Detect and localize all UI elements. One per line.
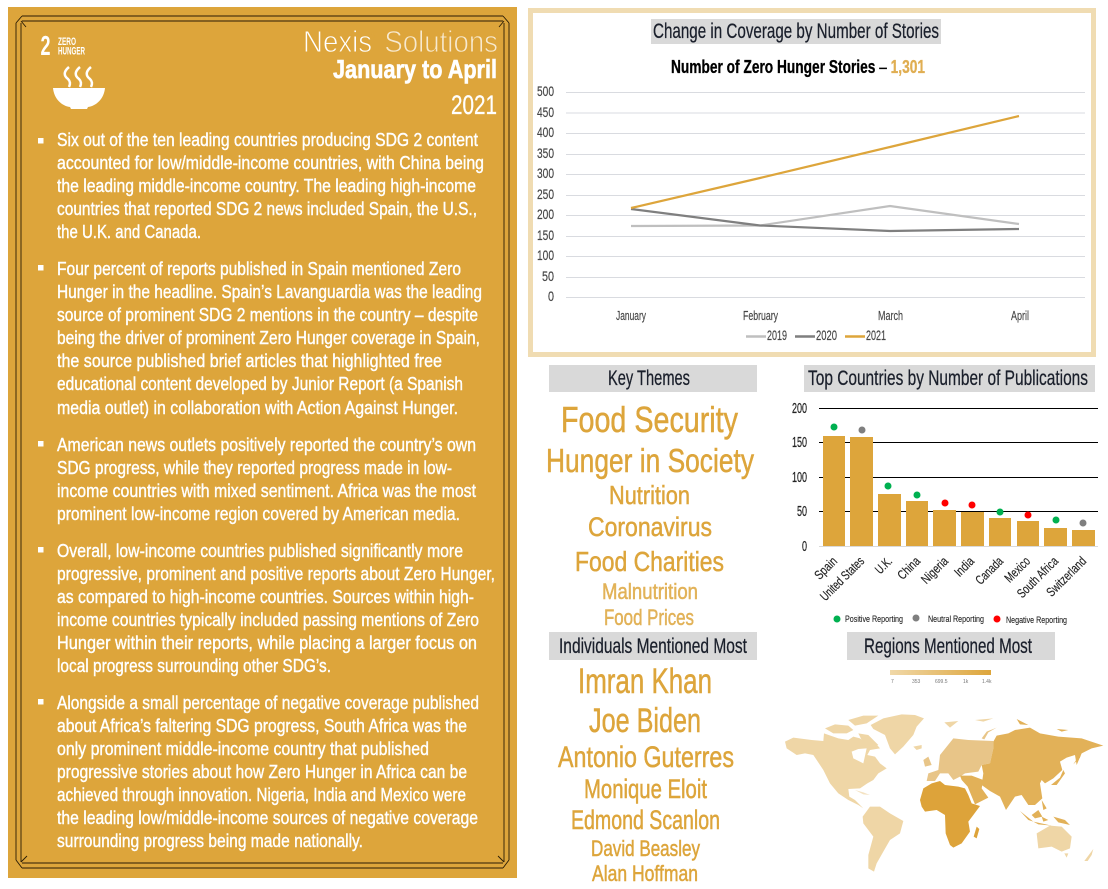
map legend: 699.5 (935, 679, 948, 685)
heading: regions: Regions Mentioned Most (864, 635, 1032, 658)
finding 4: Overall, low-income countries published significantly more (57, 540, 463, 561)
heading: key themes: Key Themes (608, 367, 690, 390)
finding 5: only prominent middle-income country that published (57, 738, 429, 759)
finding 2: educational content developed by Junior Report (a Spanish (57, 373, 463, 394)
heading: date range: January to April (333, 54, 497, 84)
map legend: 1.4k (982, 679, 992, 685)
word cloud: key themes: Food Security (561, 399, 738, 440)
word cloud: individuals (558, 662, 734, 886)
chart legend (746, 328, 886, 343)
heading: individuals (549, 632, 757, 660)
finding 3: prominent low-income region covered by American media. (57, 503, 460, 524)
word cloud: individuals: Imran Khan (578, 662, 712, 701)
finding 3: income countries with mixed sentiment. Africa was the most (57, 480, 476, 501)
word cloud: key themes: Food Charities (575, 546, 724, 577)
finding 3: American news outlets positively reported the country’s own (57, 434, 476, 455)
bar chart legend: Neutral Reporting (928, 614, 984, 625)
finding 4: local progress surrounding other SDG’s. (57, 655, 331, 676)
bar chart: top countries (792, 400, 1098, 626)
finding 2: Four percent of reports published in Spain mentioned Zero (57, 258, 461, 279)
finding 5: the leading low/middle-income sources of negative coverage (57, 807, 478, 828)
map legend: 7 (891, 679, 894, 685)
line chart: 0 (548, 289, 554, 304)
bar chart: top countries: China (894, 553, 924, 583)
word cloud: individuals: Edmond Scanlon (571, 805, 720, 835)
word cloud: individuals: Monique Eloit (584, 774, 707, 804)
finding 5: about Africa’s faltering SDG progress, South Africa was the (57, 715, 467, 736)
finding 4: Hunger within their reports, while placing a larger focus on (57, 632, 477, 653)
finding 5: achieved through innovation. Nigeria, India and Mexico were (57, 784, 466, 805)
map: Eurasia, Africa and Oceania (920, 718, 1103, 861)
heading: regions (847, 632, 1055, 660)
line chart: 350 (537, 146, 554, 161)
finding 2 (38, 258, 482, 418)
finding 5: progressive stories about how Zero Hunger in Africa can be (57, 761, 467, 782)
subheading: number of stories: Number of Zero Hunger Stories – 1,301 (671, 57, 925, 77)
heading: year: 2021 (451, 90, 497, 120)
line chart: 500 (537, 84, 554, 99)
finding 5: surrounding progress being made nationally. (57, 830, 363, 851)
bar chart: top countries: South Africa (1014, 553, 1062, 601)
map legend: 353 (912, 679, 921, 685)
bar chart: top countries: 0 (802, 538, 807, 555)
bar chart: top countries: U.K. (872, 554, 895, 577)
bar chart: top countries: Switzerland (1043, 554, 1089, 599)
bar chart: top countries: 50 (797, 503, 807, 520)
heading: individuals: Individuals Mentioned Most (559, 635, 747, 658)
word cloud: key themes: Food Prices (604, 605, 694, 630)
chart legend: 2021 (866, 328, 886, 343)
finding 5 (38, 692, 479, 851)
line chart: 300 (537, 166, 554, 181)
bar chart legend: Positive Reporting (845, 614, 903, 625)
map: Americas (783, 714, 924, 872)
logo: SDG 2 zero hunger (40, 30, 105, 109)
line chart: 100 (537, 248, 554, 263)
word cloud: individuals: David Beasley (591, 836, 700, 861)
finding 1: the U.K. and Canada. (57, 221, 201, 242)
finding 3 (38, 434, 476, 524)
line chart (537, 84, 1085, 343)
bar chart: top countries: United States (817, 553, 867, 604)
finding 2: media outlet) in collaboration with Action Against Hunger. (57, 397, 458, 418)
bar chart legend: Negative Reporting (1006, 615, 1067, 626)
bar chart: top countries: 100 (792, 469, 807, 486)
finding 4: income countries typically included passing mentions of Zero (57, 609, 479, 630)
logo: SDG 2 zero hunger: ZERO (58, 36, 76, 48)
finding 1: Six out of the ten leading countries producing SDG 2 content (57, 129, 478, 150)
line chart: 50 (542, 269, 554, 284)
brand: Nexis Solutions: Nexis (303, 24, 381, 59)
panel: change in coverage (530, 10, 1094, 354)
bar chart: top countries: Mexico (1001, 554, 1033, 585)
map legend: 1k (963, 679, 969, 685)
line chart: 450 (537, 105, 554, 120)
map legend (890, 670, 992, 685)
word cloud: key themes (546, 399, 754, 630)
line chart: 200 (537, 207, 554, 222)
word cloud: key themes: Hunger in Society (546, 442, 754, 479)
panel: summary (8, 7, 517, 878)
finding 1: the leading middle-income country. The leading high-income (57, 175, 476, 196)
finding 2: being the driver of prominent Zero Hunger coverage in Spain, (57, 327, 480, 348)
finding 5: Alongside a small percentage of negative coverage published (57, 692, 479, 713)
finding 4: progressive, prominent and positive reports about Zero Hunger, (57, 563, 495, 584)
brand: Nexis Solutions: ® (372, 31, 377, 39)
bar chart legend (834, 614, 1067, 626)
line chart: February (743, 308, 778, 323)
icon: soup bowl (53, 67, 105, 109)
bar chart: top countries: Canada (972, 553, 1007, 587)
word cloud: individuals: Alan Hoffman (592, 861, 698, 886)
finding 1: countries that reported SDG 2 news included Spain, the U.S., (57, 198, 477, 219)
line chart: January (616, 308, 646, 323)
logo: SDG 2 zero hunger: HUNGER (58, 46, 85, 58)
finding 2: the source published brief articles that highlighted free (57, 350, 442, 371)
finding 1 (38, 129, 484, 242)
finding 4: as compared to high-income countries. Sources within high- (57, 586, 474, 607)
bar chart: top countries: 150 (792, 434, 807, 451)
word cloud: individuals: Antonio Guterres (558, 741, 734, 774)
brand: Nexis Solutions: Solutions (377, 24, 498, 59)
bar chart: top countries: 200 (792, 400, 807, 417)
bar chart: top countries: Spain (811, 554, 840, 583)
heading: change in coverage: Change in Coverage by Number of Stories (653, 20, 939, 43)
heading: change in coverage (651, 19, 941, 44)
chart legend: 2020 (816, 328, 837, 343)
line chart: March (878, 308, 903, 323)
line chart: 150 (537, 228, 554, 243)
word cloud: key themes: Malnutrition (602, 579, 698, 604)
bar chart: top countries: India (951, 553, 978, 580)
finding 4 (38, 540, 495, 676)
chart legend: 2019 (767, 328, 787, 343)
line chart: 250 (537, 187, 554, 202)
heading: key themes (549, 365, 757, 392)
text block: key findings (38, 129, 495, 851)
finding 2: Hunger in the headline. Spain’s Lavanguardia was the leading (57, 281, 482, 302)
line chart: April (1011, 308, 1029, 323)
logo: SDG 2 zero hunger: 2 (40, 30, 50, 61)
finding 1: accounted for low/middle-income countries, with China being (57, 152, 484, 173)
line chart: 400 (537, 125, 554, 140)
word cloud: individuals: Joe Biden (589, 702, 701, 740)
finding 2: source of prominent SDG 2 mentions in the country – despite (57, 304, 478, 325)
word cloud: key themes: Coronavirus (588, 512, 712, 542)
bar chart: top countries: Nigeria (918, 553, 952, 587)
world map (783, 714, 1103, 872)
finding 3: SDG progress, while they reported progress made in low- (57, 457, 452, 478)
word cloud: key themes: Nutrition (609, 480, 690, 510)
